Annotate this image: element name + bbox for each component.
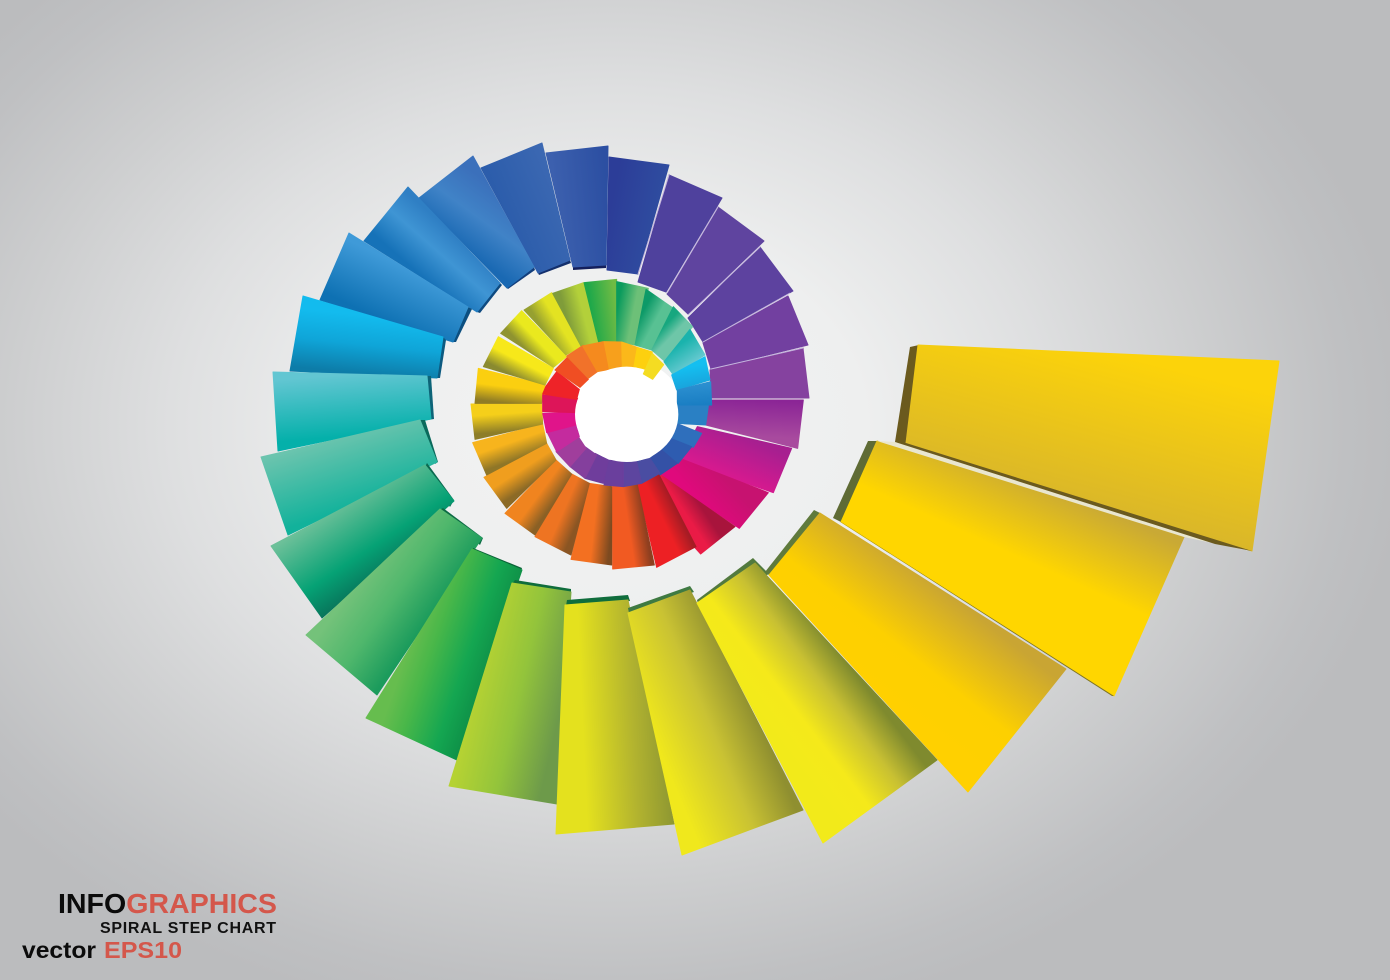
inner rings, drawn in zoom-crop coordinates: [471, 279, 803, 569]
step: yellow-green: [524, 293, 582, 355]
step: gold: [473, 424, 547, 475]
step 15: blue step: [364, 187, 502, 313]
step: sky blue: [677, 382, 712, 406]
step 16: blue step: [419, 156, 535, 289]
step: cyan: [672, 357, 710, 390]
final small yellow step: [643, 353, 664, 379]
step: crimson magenta: [658, 458, 768, 528]
step: lime: [553, 283, 599, 347]
caption: EPS10: EPS10: [104, 937, 182, 963]
caption heading: INFOGRAPHICS: INFOGRAPHICS: [58, 888, 277, 919]
step 21: violet step: [667, 207, 764, 314]
step: light teal: [652, 307, 693, 361]
step 7: lime step: [449, 580, 571, 804]
white centre hole: [575, 367, 678, 462]
step: yellow: [501, 311, 567, 367]
step: amber: [484, 443, 556, 508]
step 8: green step: [366, 548, 522, 760]
step: orange: [571, 483, 612, 565]
step 3: yellow step: [765, 510, 1066, 792]
step: gold-yellow: [475, 368, 545, 403]
step 13: cyan step: [290, 296, 446, 378]
step 12: aqua step: [273, 372, 434, 451]
step 17: royal blue step: [481, 143, 571, 275]
step 14: blue step: [320, 233, 472, 342]
step: orange: [535, 474, 589, 555]
step: green-teal: [617, 282, 648, 345]
step 4: lemon step: [697, 558, 937, 843]
step 1: largest yellow step: [877, 345, 1279, 551]
step: green: [584, 279, 617, 345]
step 6: yellow-green step: [556, 595, 674, 834]
step: yellow: [483, 337, 553, 385]
step 19: indigo step: [607, 157, 669, 274]
step: magenta-purple: [706, 400, 803, 448]
step 5: lemon step: [628, 586, 803, 855]
caption: vector: vector: [22, 937, 96, 963]
step 24: purple step: [710, 348, 809, 398]
step: red: [637, 473, 696, 567]
step 18: royal blue step: [546, 146, 608, 270]
step: orange: [505, 460, 572, 535]
step: crimson: [637, 473, 735, 554]
step: magenta: [680, 427, 792, 493]
step 10: teal-green step: [271, 463, 454, 618]
step: aqua: [664, 329, 705, 375]
step 9: green step: [306, 508, 483, 695]
outer spiral steps: [261, 143, 1279, 855]
step 2: yellow step: [833, 441, 1184, 696]
step 23: purple step: [703, 296, 808, 369]
step 20: violet step: [638, 175, 722, 292]
step 22: violet step: [688, 247, 793, 342]
step: gold-yellow: [471, 404, 543, 439]
caption block: [22, 888, 277, 963]
white backing of the centre: [568, 359, 685, 469]
step: orange-red: [612, 482, 654, 569]
step 11: teal step: [261, 420, 438, 535]
step: teal: [635, 289, 673, 350]
spiral staircase chart: [261, 143, 1279, 855]
caption subheading: SPIRAL STEP CHART: [100, 920, 276, 937]
innermost ring of small steps: [543, 342, 708, 487]
